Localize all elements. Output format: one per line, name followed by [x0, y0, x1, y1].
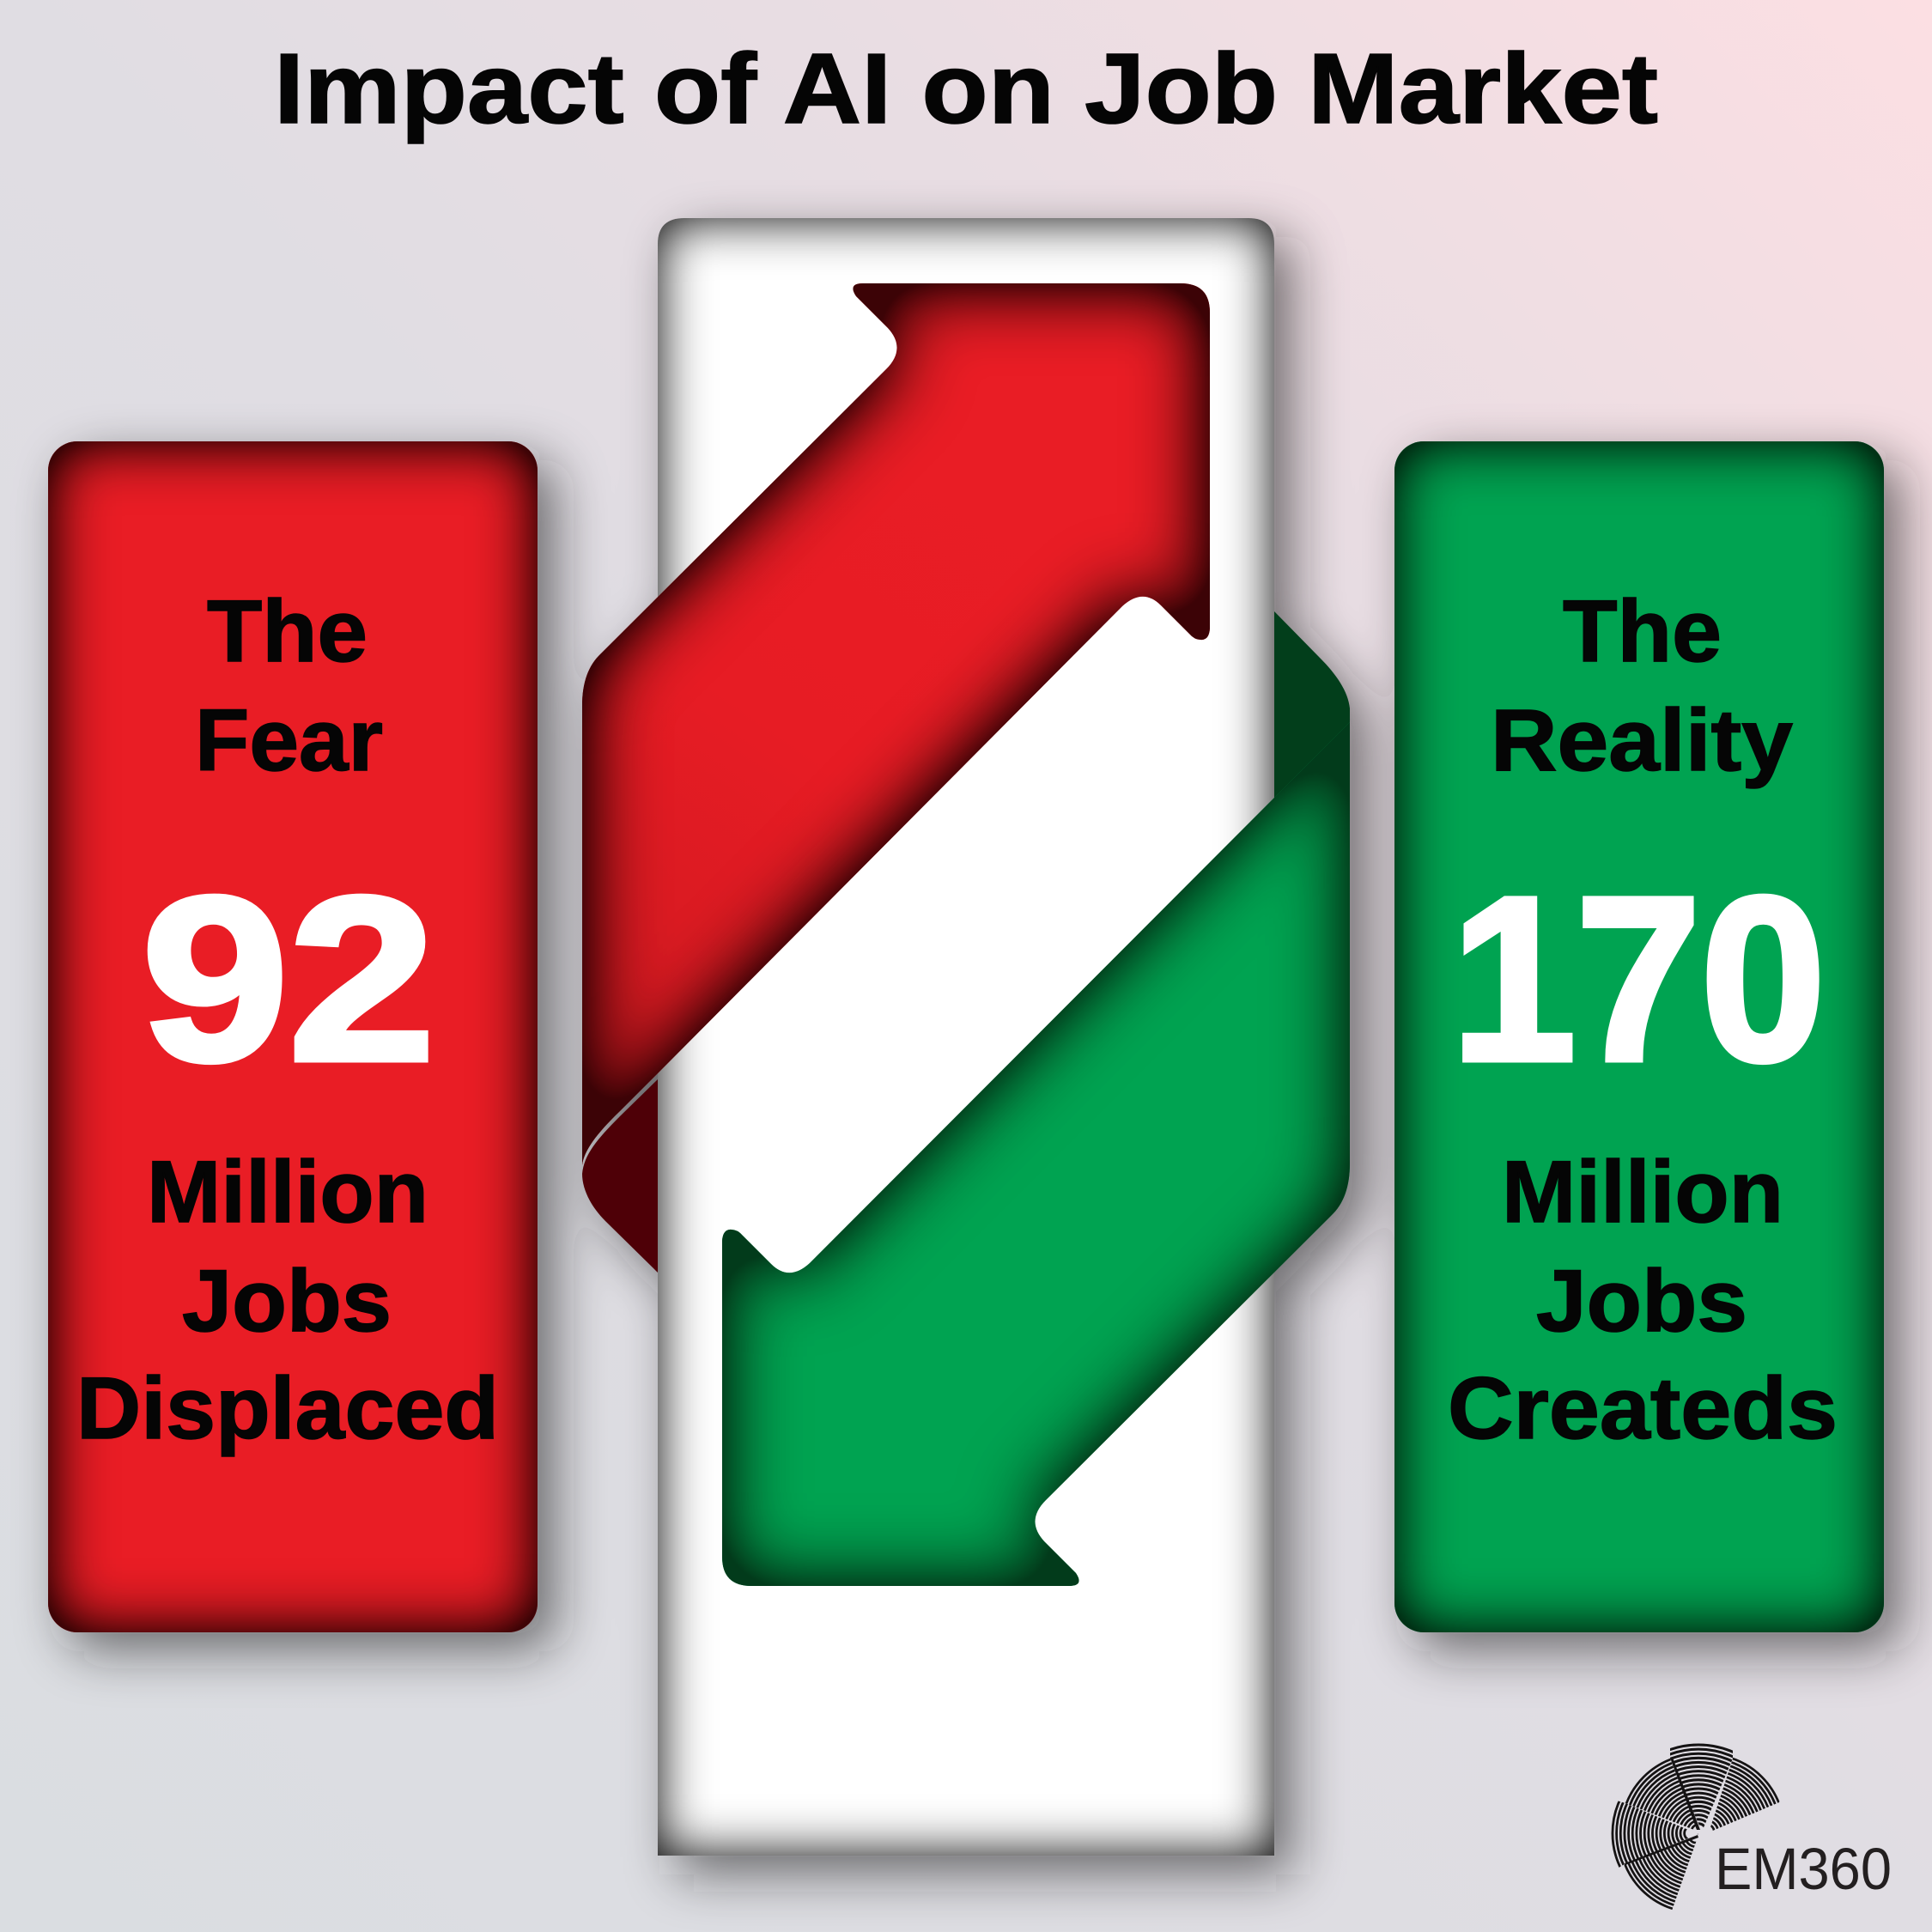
reality number: 170 [1451, 848, 1826, 1109]
fear heading: Fear [195, 691, 383, 789]
logo wordmark: EM360 [1715, 1836, 1892, 1902]
reality heading: The [1563, 582, 1722, 680]
title: Impact of AI on Job Market [274, 33, 1658, 144]
reality description: Jobs [1536, 1252, 1747, 1350]
fold: red arrow wrap [582, 1079, 658, 1273]
fear description: Million [147, 1143, 428, 1241]
logo mark [1612, 1745, 1785, 1918]
fear description [76, 1143, 499, 1457]
fear panel background [48, 441, 538, 1632]
reality description: Createds [1448, 1359, 1838, 1457]
reality heading: Reality [1491, 691, 1793, 789]
logo: EM360 [1612, 1745, 1892, 1918]
fear description: Jobs [182, 1252, 392, 1350]
reality heading [1491, 582, 1793, 789]
reality description [1448, 1143, 1838, 1457]
panel: the reality [1394, 441, 1884, 1632]
fear heading: The [207, 582, 368, 680]
fold: green arrow wrap [1274, 611, 1350, 848]
fear number: 92 [142, 848, 435, 1109]
arrow: red rising [582, 283, 1210, 1165]
central white panel [658, 218, 1274, 1856]
panel: the fear [48, 441, 538, 1632]
arrow: green falling [722, 722, 1350, 1586]
fear heading [195, 582, 383, 789]
reality description: Million [1502, 1143, 1783, 1241]
fear description: Displaced [76, 1359, 499, 1457]
reality panel background [1394, 441, 1884, 1632]
